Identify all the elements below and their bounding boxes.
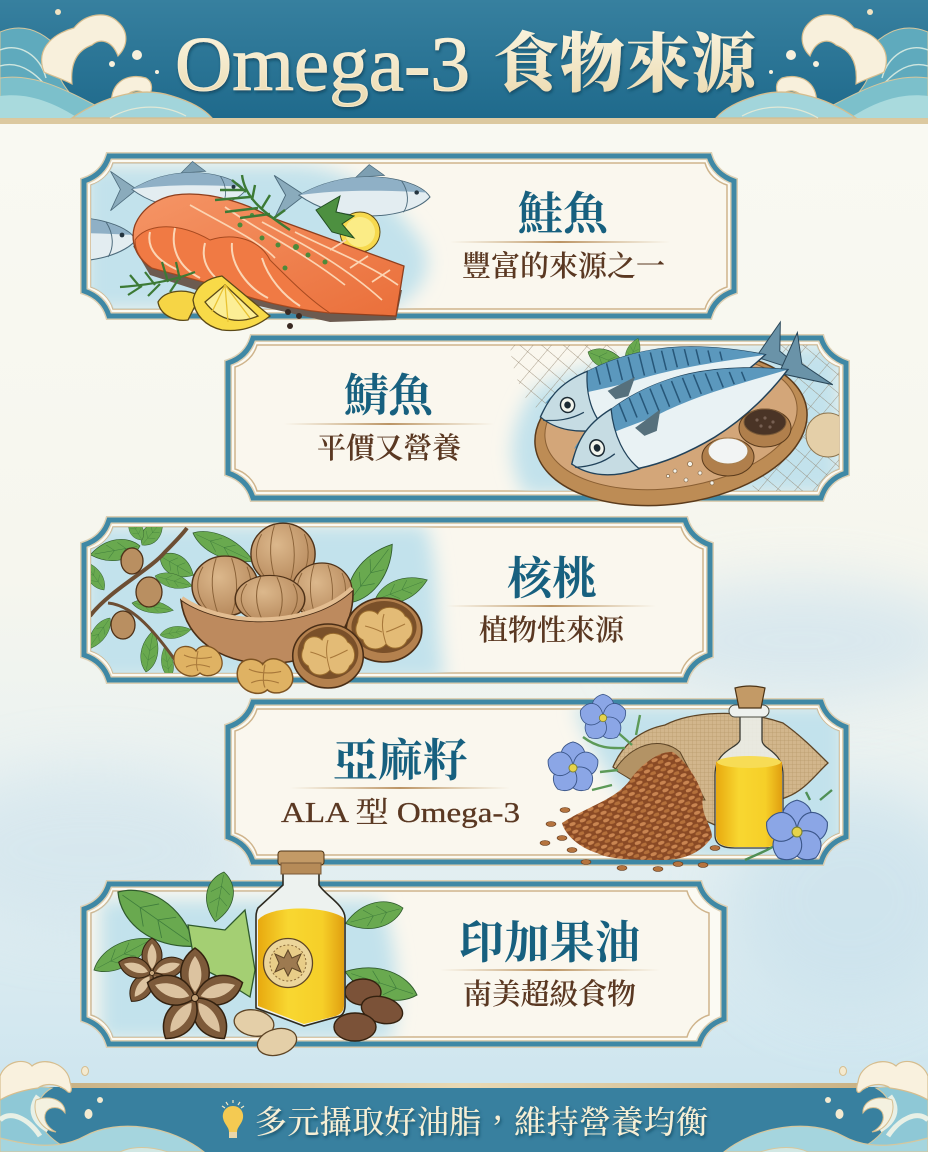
icon: sacha oil bottle (256, 851, 345, 1026)
footer message: 多元攝取好油脂，維持營養均衡 (255, 1097, 708, 1143)
icon: salmon fillet (133, 194, 404, 322)
icon: flax stems (583, 715, 640, 790)
flaxseed name: 亞麻籽 (333, 724, 468, 789)
icon: walnut half lower (293, 624, 363, 688)
main title: Omega-3 (175, 20, 470, 107)
mackerel name: 鯖魚 (344, 359, 436, 424)
icon: flax flower bottom right (745, 790, 832, 866)
icon: salt bowl (702, 438, 754, 476)
divider mackerel (284, 423, 494, 425)
icon: burlap sack (613, 713, 828, 825)
icon: peppercorns (285, 309, 302, 329)
header waves right (716, 9, 928, 118)
fishing net left (510, 345, 620, 410)
icon: fish behind fillet (third) (91, 218, 134, 260)
icon: dark nuts (334, 979, 406, 1041)
divider sacha (440, 969, 660, 971)
panel: salmon (0, 156, 734, 330)
bottle label (264, 938, 312, 988)
sacha name: 印加果油 (459, 906, 640, 971)
icon: wooden bowl (181, 588, 353, 664)
icon: flax flower top (577, 694, 629, 744)
icon: mackerel back (531, 314, 808, 445)
icon: spilled flaxseed (540, 752, 720, 872)
main title (175, 11, 761, 107)
icon: rosemary top (215, 175, 290, 230)
icon: pepper bowl (739, 409, 791, 447)
icon: walnut piece left (174, 646, 222, 676)
divider flaxseed (290, 787, 510, 789)
icon: mackerel front (556, 323, 836, 494)
footer wave left (0, 1061, 204, 1152)
walnut name: 核桃 (507, 542, 598, 607)
flaxseed description: ALA 型 Omega-3 (281, 796, 520, 829)
icon: walnut half right (346, 598, 422, 662)
sacha description: 南美超級食物 (463, 972, 636, 1013)
icon: salmon whole fish left (111, 161, 245, 211)
icon: basil leaves (585, 336, 644, 376)
icon: shell (806, 412, 839, 458)
walnut description: 植物性來源 (479, 608, 626, 649)
icon: parsley (316, 196, 354, 238)
icon: flax flower left (545, 742, 601, 796)
icon: pale nuts (232, 1007, 300, 1060)
icon: wooden plate (525, 334, 817, 522)
panel: flaxseed (228, 686, 846, 872)
icon: sacha star pods (116, 938, 247, 1047)
panel: mackerel (224, 320, 850, 506)
fishing net right (752, 345, 839, 491)
mackerel description: 平價又營養 (317, 426, 461, 467)
icon: lemon behind fillet (340, 212, 380, 252)
header banner (0, 0, 928, 124)
icon: salt grains (666, 462, 714, 485)
salmon description: 豐富的來源之一 (462, 244, 665, 285)
footer banner (0, 1061, 928, 1152)
footer wave right (724, 1061, 928, 1152)
panel: walnut (78, 515, 710, 693)
icon: light bulb (222, 1100, 244, 1138)
icon: leaves around bowl (189, 524, 431, 611)
icon: salmon whole fish right (274, 165, 430, 219)
icon: oil bottle (715, 686, 783, 848)
icon: rosemary lower (120, 262, 195, 296)
divider walnut (446, 605, 656, 607)
main title: 食物來源 (494, 11, 761, 105)
header waves left (0, 9, 212, 118)
salmon name: 鮭魚 (518, 177, 611, 242)
icon: walnut piece center (237, 659, 293, 693)
panel: sacha inchi oil (84, 851, 724, 1060)
icon: green leaves (89, 870, 421, 1008)
icon: lemon slices (158, 276, 270, 330)
icon: walnut branch with leaves (91, 527, 194, 673)
icon: green sacha fruit (188, 910, 255, 997)
divider salmon (450, 241, 670, 243)
icon: whole walnuts (192, 523, 352, 623)
